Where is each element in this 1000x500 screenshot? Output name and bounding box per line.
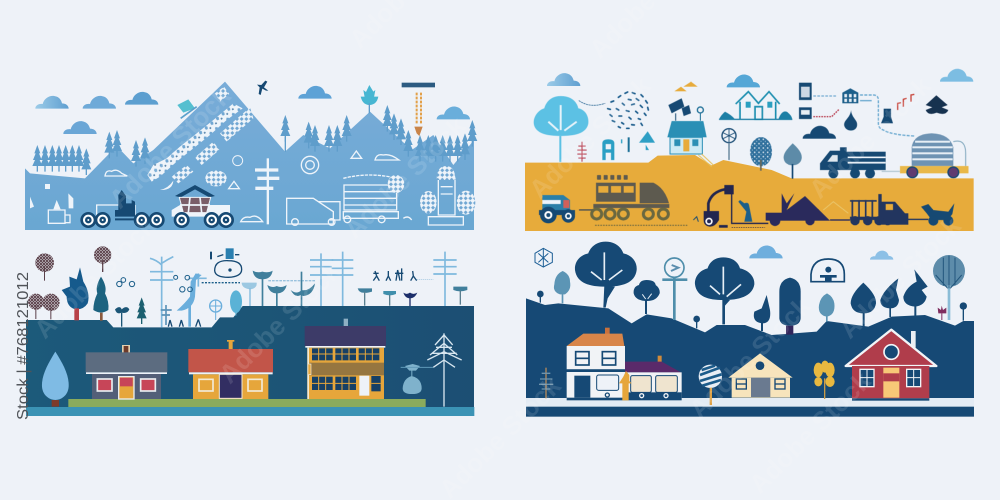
clock sign bbox=[662, 258, 687, 320]
flame trees bbox=[754, 269, 928, 335]
orange figure bbox=[619, 371, 632, 400]
panel: dark teal with houses bbox=[26, 246, 474, 416]
yellow leafy tree bbox=[814, 361, 835, 399]
dome icon bbox=[811, 259, 844, 282]
truck with city skyline bbox=[80, 190, 165, 228]
watermarks: Adobe Stock bbox=[338, 110, 472, 244]
light blue poles and antennas bbox=[150, 252, 457, 327]
olive bus truck bbox=[579, 175, 698, 225]
vertical stock id text: Stock | #768121012 bbox=[15, 272, 32, 420]
lollipop dots bbox=[537, 291, 967, 328]
small red pine bbox=[577, 142, 587, 162]
blue spiky tree bbox=[62, 267, 89, 320]
white shop house bbox=[567, 328, 625, 400]
lattice domes bbox=[205, 166, 475, 215]
gray-blue small trees bbox=[554, 271, 835, 322]
clouds bbox=[749, 245, 893, 260]
raindrop tree bbox=[42, 352, 69, 407]
house on hill bbox=[667, 98, 713, 167]
treeline bbox=[32, 105, 477, 175]
small trees bbox=[115, 297, 147, 327]
small gray pine bbox=[539, 368, 553, 398]
circles and dashes bbox=[117, 275, 315, 292]
blue bush bbox=[401, 364, 433, 394]
watermarks: Adobe Stock bbox=[743, 365, 877, 499]
small sign trees bbox=[161, 290, 242, 325]
silo trailer bbox=[900, 133, 968, 178]
watermarks: Adobe Stock bbox=[28, 210, 162, 344]
medium tree bbox=[634, 280, 660, 314]
navy hills bbox=[526, 298, 974, 398]
watermarks: Adobe Stock bbox=[833, 210, 967, 344]
icon: airplane bbox=[257, 81, 268, 95]
big blue tree bbox=[534, 96, 588, 162]
bare trees bbox=[28, 246, 111, 319]
watermarks: Adobe Stock bbox=[213, 255, 347, 389]
small tree signs bbox=[722, 129, 802, 179]
large tree left bbox=[575, 242, 637, 308]
excavator and worker bbox=[704, 185, 768, 228]
watermarks: Adobe Stock bbox=[523, 70, 657, 204]
gray house bbox=[86, 345, 167, 399]
twin houses bbox=[719, 92, 792, 120]
clouds bbox=[35, 86, 470, 134]
icon: teal buoy on peak bbox=[361, 85, 378, 113]
oval phone icon bbox=[211, 248, 242, 277]
mountain silhouette bbox=[25, 82, 474, 230]
white line art: vehicles, towers, signs bbox=[48, 151, 463, 225]
teal ground bbox=[26, 306, 474, 407]
water strip bbox=[26, 407, 474, 416]
white frost pine bbox=[427, 333, 462, 407]
dotted swarm bbox=[579, 92, 648, 128]
diagonal slope bands bbox=[147, 87, 253, 190]
two-storey house bbox=[305, 319, 386, 399]
red house bbox=[846, 330, 936, 401]
purple roof annex bbox=[605, 356, 682, 400]
round gray tree bbox=[933, 255, 965, 320]
network of icons bbox=[799, 83, 915, 136]
pale road bbox=[526, 398, 974, 407]
light blue bird shape bbox=[177, 273, 202, 327]
watermarks: Adobe Stock bbox=[683, 290, 817, 424]
red music notes bbox=[898, 94, 914, 110]
icon: hex cube bbox=[535, 248, 552, 267]
icon: screen on summit bbox=[177, 99, 197, 118]
small tractor bbox=[539, 195, 575, 223]
panel: yellow ground with machinery bbox=[525, 69, 974, 231]
cream cottage bbox=[728, 353, 793, 398]
black house symbol bbox=[926, 95, 948, 114]
white tower bbox=[30, 158, 279, 224]
blue flatbed truck bbox=[820, 147, 900, 178]
clouds bbox=[547, 69, 973, 139]
watermarks: Adobe Stock bbox=[103, 80, 237, 214]
orange house bbox=[188, 340, 273, 399]
navy base strip bbox=[526, 407, 974, 417]
orange roof shapes bbox=[674, 82, 698, 91]
sign with dotted beams bbox=[402, 83, 435, 136]
letter A icons bbox=[602, 131, 655, 160]
mushroom trees bbox=[242, 271, 467, 306]
small purple plant bbox=[938, 306, 946, 320]
walking people bbox=[168, 268, 433, 327]
cart bbox=[921, 203, 954, 226]
watermarks: Adobe Stock bbox=[803, 70, 937, 204]
log truck bbox=[850, 194, 928, 225]
large tree middle bbox=[695, 257, 754, 324]
panel: navy hills with houses bbox=[526, 242, 974, 417]
panel: blue mountains with vehicles bbox=[25, 81, 477, 230]
teal pine tree bbox=[93, 277, 109, 321]
yellow ground bbox=[525, 155, 974, 231]
striped lollipop sign bbox=[699, 365, 722, 405]
green lawn strip bbox=[68, 399, 426, 407]
dark pile machine bbox=[766, 193, 850, 226]
truck with barn bbox=[172, 185, 234, 228]
